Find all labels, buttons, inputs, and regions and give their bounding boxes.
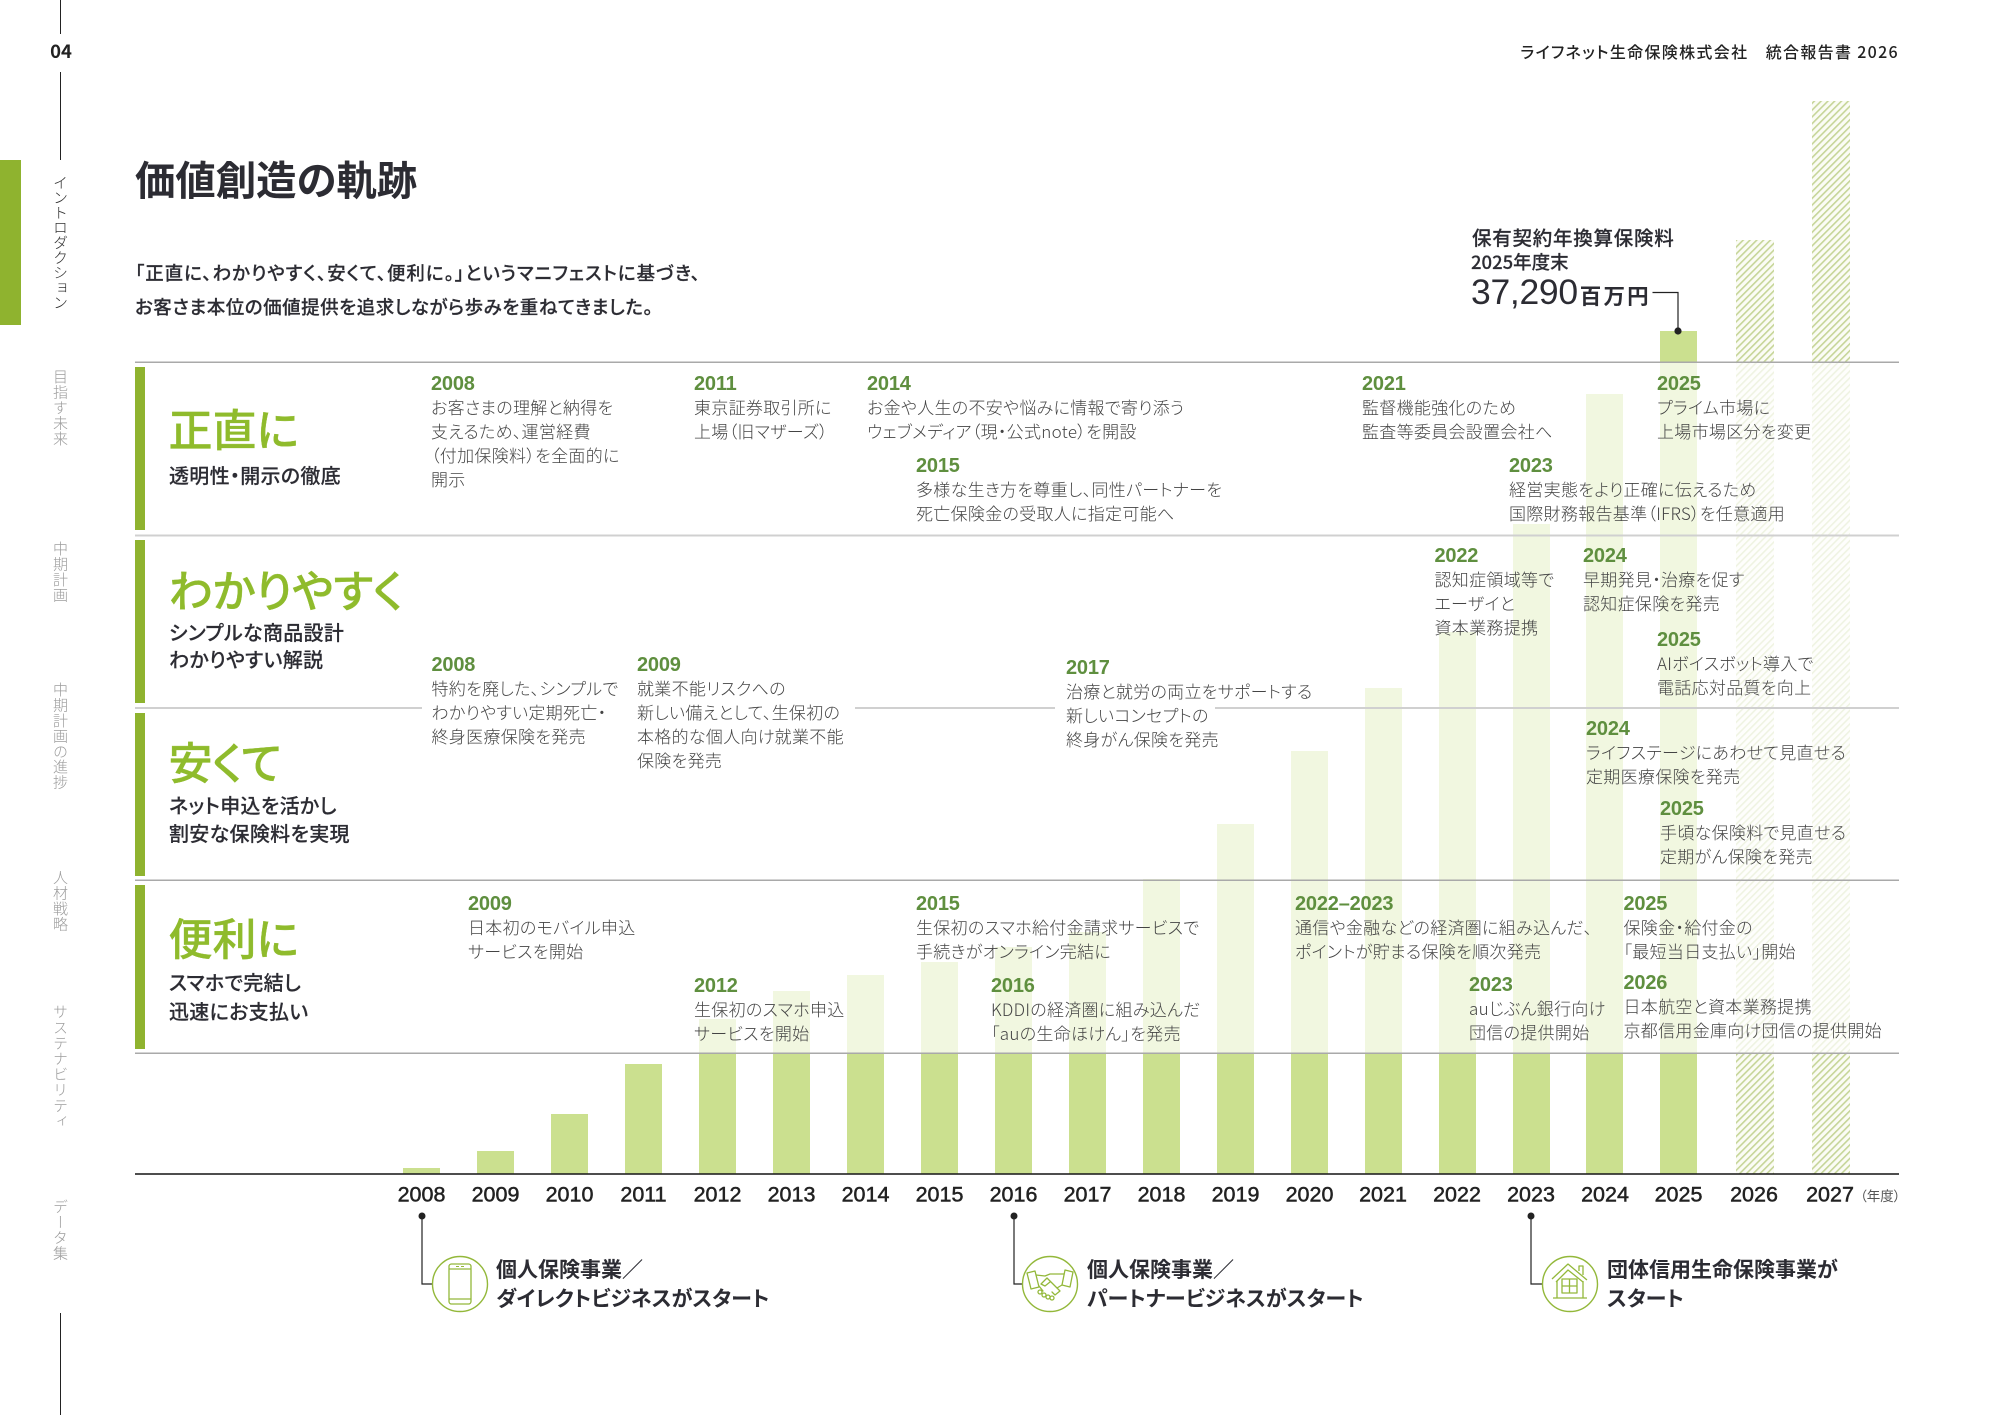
event 2012: 生保初のスマホ申込 <box>694 996 845 1020</box>
event 2014: ウェブメディア（現・公式note）を開設 <box>867 418 1137 442</box>
event 2025: AIボイスボット導入で <box>1657 650 1814 674</box>
event 2022–2023: 2022–2023 <box>1295 892 1393 914</box>
event 2025: 保険金・給付金の <box>1624 914 1753 938</box>
event 2022: 2022 <box>1434 544 1478 566</box>
white veil over the panel band <box>135 362 1899 1053</box>
accent bar <box>135 540 145 703</box>
subheading: シンプルな商品設計 <box>169 616 344 646</box>
event 2012 <box>694 974 845 1044</box>
event 2024 <box>1583 544 1745 614</box>
event 2012: 2012 <box>694 974 738 996</box>
bar chart: annualized premiums in force: 2010 <box>546 1182 593 1206</box>
subheading <box>169 790 350 847</box>
bar chart: annualized premiums in force: 2012 <box>694 1182 741 1206</box>
event 2009: 本格的な個人向け就業不能 <box>637 722 844 748</box>
event 2014 <box>867 372 1184 442</box>
bar chart: annualized premiums in force: 2022 <box>1433 1182 1481 1206</box>
event 2025: 2025 <box>1657 372 1701 394</box>
event 2008: 特約を廃した、シンプルで <box>432 674 618 700</box>
callout text: 個人保険事業／ <box>496 1254 643 1284</box>
subheading <box>169 616 344 673</box>
event 2025: 「最短当日支払い」開始 <box>1624 938 1796 962</box>
event 2025: プライム市場に <box>1657 394 1770 418</box>
intro text: 「正直に、わかりやすく、安くて、便利に。」というマニフェストに基づき、 <box>135 260 701 286</box>
event 2017: 新しいコンセプトの <box>1066 702 1209 726</box>
event 2023: 国際財務報告基準（IFRS）を任意適用 <box>1509 500 1785 524</box>
subheading: わかりやすい解説 <box>169 644 323 673</box>
bar chart: annualized premiums in force: 2014 <box>842 1182 889 1206</box>
active section marker <box>0 160 21 325</box>
event 2021: 監査等委員会設置会社へ <box>1362 418 1553 442</box>
callout text: 個人保険事業／ <box>1087 1254 1234 1284</box>
event 2009: 就業不能リスクへの <box>637 674 786 700</box>
sidebar navigation <box>0 0 72 1415</box>
event 2026 <box>1624 972 1882 1042</box>
event 2024: 2024 <box>1586 718 1630 740</box>
event 2024: ライフステージにあわせて見直せる <box>1586 739 1846 764</box>
heading: 安くて: 安くて <box>168 728 282 792</box>
event 2025 <box>1624 892 1796 962</box>
event 2022: エーザイと <box>1434 590 1515 614</box>
event 2023: 2023 <box>1509 454 1553 476</box>
icon: house <box>1525 1210 1600 1315</box>
event 2016: 「auの生命ほけん」を発売 <box>991 1020 1181 1044</box>
icon: smartphone <box>418 1212 488 1312</box>
callout text: 団体信用生命保険事業が <box>1607 1254 1838 1284</box>
event 2008 <box>431 372 620 490</box>
heading: 便利に: 便利に <box>168 904 299 968</box>
event 2025 <box>1657 372 1811 442</box>
event 2022 <box>1434 544 1554 638</box>
event 2011 <box>694 372 832 442</box>
event 2015: 2015 <box>916 454 960 476</box>
bar chart: annualized premiums in force: 2027 <box>1806 1182 1854 1206</box>
event 2021 <box>1362 372 1553 442</box>
event 2023 <box>1469 974 1606 1044</box>
sidebar rule bottom <box>60 1313 61 1415</box>
subheading: 透明性・開示の徹底 <box>169 460 341 488</box>
panel: 便利に <box>135 885 1882 1049</box>
nav item: 中期計画の進捗: 中期計画の進捗 <box>50 682 71 790</box>
event 2024: 定期医療保険を発売 <box>1586 763 1740 788</box>
event 2023: auじぶん銀行向け <box>1469 995 1606 1020</box>
heading: 正直に: 正直に <box>168 395 299 459</box>
nav item: 目指す未来: 目指す未来 <box>50 369 71 446</box>
callout text <box>1607 1254 1838 1314</box>
nav item: データ集: データ集 <box>50 1199 71 1261</box>
bar chart: annualized premiums in force: 2024 <box>1581 1182 1629 1206</box>
callout: annualized premium 2025 <box>1471 222 1682 335</box>
callout label: 保有契約年換算保険料 <box>1472 222 1675 251</box>
event 2025 <box>1657 628 1814 698</box>
event 2008: お客さまの理解と納得を <box>431 394 613 418</box>
event 2021: 監督機能強化のため <box>1362 394 1516 418</box>
event 2011: 2011 <box>694 372 737 394</box>
callout date: 2025年度末 <box>1471 248 1569 274</box>
event 2022–2023: ポイントが貯まる保険を順次発売 <box>1295 938 1541 962</box>
event 2025: 2025 <box>1657 628 1701 650</box>
event 2025: 定期がん保険を発売 <box>1660 842 1813 868</box>
event 2009: サービスを開始 <box>468 938 583 962</box>
event 2009: 日本初のモバイル申込 <box>468 914 636 938</box>
callout text <box>496 1254 769 1313</box>
event 2023: 団信の提供開始 <box>1469 1019 1590 1044</box>
event 2022–2023: 通信や金融などの経済圏に組み込んだ、 <box>1295 914 1592 938</box>
event 2021: 2021 <box>1362 372 1406 394</box>
event 2022: 資本業務提携 <box>1434 614 1538 638</box>
header: report name: ライフネット生命保険株式会社 統合報告書 2026 <box>1520 39 1899 63</box>
subheading: 割安な保険料を実現 <box>169 818 350 847</box>
event 2008: 2008 <box>431 372 475 394</box>
event 2024: 認知症保険を発売 <box>1583 590 1720 614</box>
event 2024 <box>1586 718 1846 788</box>
event 2008: 2008 <box>432 654 475 676</box>
callout: partner business start <box>1010 1212 1364 1313</box>
sidebar rule middle <box>60 72 61 160</box>
callout text: スタート <box>1607 1283 1684 1313</box>
event 2015: 2015 <box>916 892 960 914</box>
event 2017: 2017 <box>1066 656 1110 678</box>
nav item: 中期計画: 中期計画 <box>50 541 71 603</box>
sidebar rule top <box>60 0 61 34</box>
event 2017 <box>1066 656 1312 750</box>
event 2024: 早期発見・治療を促す <box>1583 566 1745 590</box>
page number: 04 <box>50 38 72 64</box>
accent bar <box>135 367 145 530</box>
bar chart: annualized premiums in force: 2026 <box>1730 1182 1778 1206</box>
subheading: スマホで完結し <box>169 966 301 996</box>
event 2009: 新しい備えとして、生保初の <box>637 698 840 724</box>
event 2017: 治療と就労の両立をサポートする <box>1066 678 1312 702</box>
panel: 安くて <box>135 713 1846 876</box>
bar chart: annualized premiums in force: 2025 <box>1655 1182 1702 1206</box>
callout connector <box>1652 292 1682 335</box>
nav item: サステナビリティ: サステナビリティ <box>50 1004 71 1129</box>
event 2015: 生保初のスマホ給付金請求サービスで <box>916 914 1199 938</box>
bar chart: annualized premiums in force: 2018 <box>1138 1182 1185 1206</box>
event 2026: 日本航空と資本業務提携 <box>1624 992 1812 1018</box>
event 2016: KDDIの経済圏に組み込んだ <box>991 996 1201 1020</box>
panel: 正直に <box>135 367 1811 530</box>
bar chart: annualized premiums in force: 2017 <box>1064 1182 1111 1206</box>
event 2015: 手続きがオンライン完結に <box>916 938 1111 962</box>
event 2025: 電話応対品質を向上 <box>1657 674 1811 698</box>
intro text: お客さま本位の価値提供を追求しながら歩みを重ねてきました。 <box>135 294 653 320</box>
subheading <box>169 966 308 1024</box>
bar chart: annualized premiums in force: 2009 <box>472 1182 519 1206</box>
callout value: 37,290百万円 <box>1471 272 1651 312</box>
event 2009: 2009 <box>637 654 681 676</box>
event 2026: 京都信用金庫向け団信の提供開始 <box>1624 1016 1882 1042</box>
bar chart: annualized premiums in force: 2013 <box>768 1182 815 1206</box>
callout: direct business start <box>418 1212 769 1313</box>
title: 価値創造の軌跡 <box>135 148 417 206</box>
event 2009: 2009 <box>468 892 512 914</box>
bar chart: annualized premiums in force: 2011 <box>620 1182 667 1206</box>
event 2026: 2026 <box>1624 972 1667 994</box>
event 2015 <box>916 892 1199 962</box>
panel: わかりやすく <box>135 540 1814 772</box>
accent bar <box>135 713 145 876</box>
event 2014: 2014 <box>867 372 911 394</box>
event 2008: （付加保険料）を全面的に <box>431 442 620 466</box>
event 2023: 経営実態をより正確に伝えるため <box>1509 476 1756 500</box>
subheading: 迅速にお支払い <box>169 996 308 1024</box>
event 2009: 保険を発売 <box>637 746 722 772</box>
callout text: ダイレクトビジネスがスタート <box>496 1283 769 1313</box>
nav item: イントロダクション: イントロダクション <box>50 175 71 310</box>
bar chart: annualized premiums in force: 2019 <box>1212 1182 1259 1206</box>
event 2016: 2016 <box>991 974 1035 996</box>
event 2017: 終身がん保険を発売 <box>1066 726 1219 750</box>
event 2023: 2023 <box>1469 974 1513 996</box>
event 2022: 認知症領域等で <box>1434 566 1554 590</box>
bar chart: annualized premiums in force: （年度） <box>1860 1185 1900 1205</box>
event 2008: 支えるため、運営経費 <box>431 418 591 442</box>
heading: わかりやすく: わかりやすく <box>168 556 403 620</box>
event 2025: 上場市場区分を変更 <box>1657 418 1811 442</box>
event 2012: サービスを開始 <box>694 1020 809 1044</box>
bar chart: annualized premiums in force: 2008 <box>398 1182 445 1206</box>
event 2024: 2024 <box>1583 544 1627 566</box>
event 2023 <box>1509 454 1785 524</box>
bar chart: annualized premiums in force: 2020 <box>1286 1182 1333 1206</box>
event 2015 <box>916 454 1222 524</box>
event 2009 <box>468 892 636 962</box>
event 2016 <box>991 974 1201 1044</box>
bar chart: annualized premiums in force: 2021 <box>1359 1182 1407 1206</box>
event 2008 <box>432 654 618 748</box>
event 2015: 多様な生き方を尊重し、同性パートナーを <box>916 476 1222 500</box>
event 2008: 終身医療保険を発売 <box>432 722 586 748</box>
subheading: ネット申込を活かし <box>169 790 337 819</box>
event 2025 <box>1660 798 1846 868</box>
callout text <box>1087 1254 1364 1314</box>
intro text <box>135 260 701 320</box>
nav item: 人材戦略: 人材戦略 <box>50 870 71 932</box>
bar chart: annualized premiums in force: 2023 <box>1507 1182 1555 1206</box>
event 2025: 手頃な保険料で見直せる <box>1660 818 1846 844</box>
event 2014: お金や人生の不安や悩みに情報で寄り添う <box>867 394 1184 418</box>
bar chart: annualized premiums in force: 2016 <box>990 1182 1037 1206</box>
event 2011: 上場（旧マザーズ） <box>694 418 828 442</box>
event 2008: 開示 <box>431 466 466 490</box>
accent bar <box>135 885 145 1049</box>
event 2022–2023 <box>1295 892 1592 962</box>
callout: group credit life start <box>1525 1209 1865 1315</box>
callout text: パートナービジネスがスタート <box>1087 1283 1364 1313</box>
event 2011: 東京証券取引所に <box>694 394 832 418</box>
event 2009 <box>637 654 844 772</box>
event 2025: 2025 <box>1624 892 1667 914</box>
event 2008: わかりやすい定期死亡・ <box>432 698 606 724</box>
bar chart: annualized premiums in force: 2015 <box>916 1182 963 1206</box>
icon: handshake <box>1010 1212 1078 1312</box>
event 2025: 2025 <box>1660 798 1704 820</box>
event 2015: 死亡保険金の受取人に指定可能へ <box>916 500 1175 524</box>
